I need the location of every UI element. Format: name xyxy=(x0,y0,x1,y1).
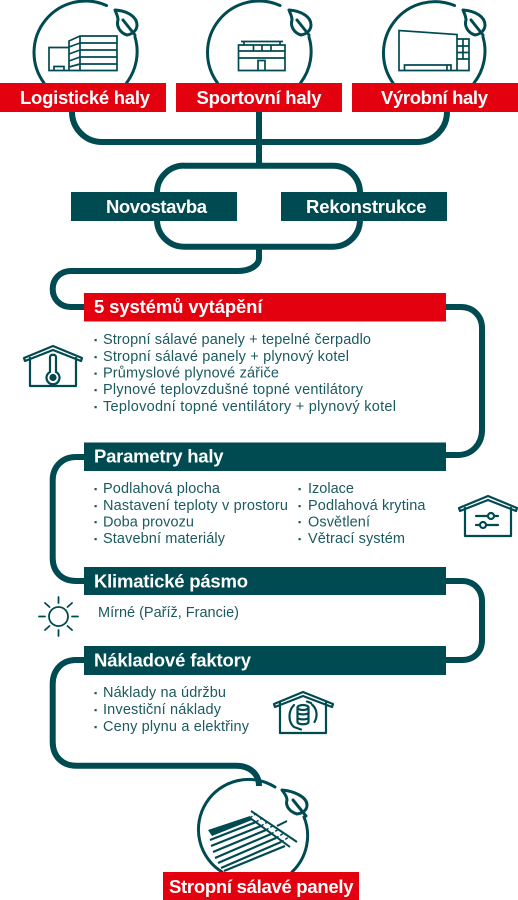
text: climate zone: Mírné (Paříž, Francie) xyxy=(98,605,239,621)
icon: house with database xyxy=(274,692,333,733)
list: hall parameters left: ▪ xyxy=(94,517,97,527)
icon: house with sliders xyxy=(459,496,517,536)
list: heating systems: ▪ xyxy=(94,352,97,362)
list: hall parameters right: ▪ xyxy=(298,517,301,527)
circle: logistické haly xyxy=(34,1,137,83)
heading: Parametry haly: Parametry haly xyxy=(94,446,224,466)
list: hall parameters left: Doba provozu xyxy=(103,514,194,530)
list: cost factors: Náklady na údržbu xyxy=(103,685,226,701)
list: heating systems: Plynové teplovzdušné topné ventilátory xyxy=(103,382,364,398)
list: hall parameters left: ▪ xyxy=(94,534,97,544)
heading: Výrobní haly xyxy=(352,83,518,112)
list: cost factors: Ceny plynu a elektřiny xyxy=(103,719,250,735)
list: heating systems: ▪ xyxy=(94,335,97,345)
list: heating systems: ▪ xyxy=(94,368,97,378)
list: hall parameters left: Stavební materiály xyxy=(103,531,226,547)
circle: výrobní haly xyxy=(383,2,485,83)
heading: Parametry haly xyxy=(84,442,446,471)
list: heating systems: Teplovodní topné ventilátory + plynový kotel xyxy=(103,399,396,415)
heading: Logistické haly: Logistické haly xyxy=(20,87,151,108)
heading: Nákladové faktory: Nákladové faktory xyxy=(94,650,252,670)
list: cost factors: ▪ xyxy=(94,688,97,698)
list: cost factors: ▪ xyxy=(94,705,97,715)
list: heating systems: Stropní sálavé panely + tepelné čerpadlo xyxy=(103,332,371,348)
heading: Stropní sálavé panely: Stropní sálavé panely xyxy=(169,876,354,897)
heading: Klimatické pásmo xyxy=(84,567,446,595)
heading: Sportovní haly: Sportovní haly xyxy=(196,87,322,108)
list: hall parameters right: Větrací systém xyxy=(308,531,405,547)
list: heating systems: Stropní sálavé panely + plynový kotel xyxy=(103,349,349,365)
list: cost factors: Investiční náklady xyxy=(103,702,222,718)
heading: Novostavba: Novostavba xyxy=(106,196,208,217)
list: hall parameters right: ▪ xyxy=(298,501,301,511)
list: hall parameters left: Podlahová plocha xyxy=(103,481,221,497)
list: hall parameters right: ▪ xyxy=(298,484,301,494)
heading: Výrobní haly: Výrobní haly xyxy=(381,87,489,108)
icon: logistics warehouse xyxy=(49,36,117,70)
icon: leaf xyxy=(289,10,311,35)
list: heating systems: ▪ xyxy=(94,402,97,412)
heading: Nákladové faktory xyxy=(84,646,446,675)
connector pipes xyxy=(53,108,482,786)
icon: factory xyxy=(399,30,469,70)
icon: radiant ceiling panel xyxy=(208,811,297,871)
circle: sportovní haly xyxy=(208,1,311,83)
icon: sun xyxy=(39,597,78,636)
list: hall parameters left xyxy=(94,481,288,547)
heading: Rekonstrukce xyxy=(281,192,447,221)
list: hall parameters left: Nastavení teploty v prostoru xyxy=(103,498,288,514)
list: heating systems: ▪ xyxy=(94,385,97,395)
heading: Klimatické pásmo: Klimatické pásmo xyxy=(94,570,248,592)
list: hall parameters right: Osvětlení xyxy=(308,514,370,530)
list: hall parameters left: ▪ xyxy=(94,501,97,511)
list: hall parameters right: Podlahová krytina xyxy=(308,498,426,514)
list: hall parameters right: Izolace xyxy=(308,481,354,497)
icon: leaf xyxy=(282,790,307,816)
heading: 5 systémů vytápění xyxy=(84,293,446,322)
list: heating systems xyxy=(94,332,396,415)
list: cost factors xyxy=(94,685,250,735)
circle: stropní sálavé panely xyxy=(198,779,308,872)
heading: Sportovní haly xyxy=(176,83,342,112)
icon: leaf xyxy=(115,10,137,35)
heading: Novostavba xyxy=(71,192,237,221)
heading: Rekonstrukce: Rekonstrukce xyxy=(306,196,426,217)
list: hall parameters right: ▪ xyxy=(298,534,301,544)
list: hall parameters right xyxy=(298,481,426,547)
icon: sports hall xyxy=(238,42,285,70)
icon: leaf xyxy=(463,10,485,35)
list: cost factors: ▪ xyxy=(94,722,97,732)
heading: 5 systémů vytápění: 5 systémů vytápění xyxy=(94,296,263,317)
list: hall parameters left: ▪ xyxy=(94,484,97,494)
icon: house with thermometer xyxy=(24,346,82,386)
heading: Logistické haly xyxy=(0,83,166,112)
list: heating systems: Průmyslové plynové zářiče xyxy=(103,366,279,382)
